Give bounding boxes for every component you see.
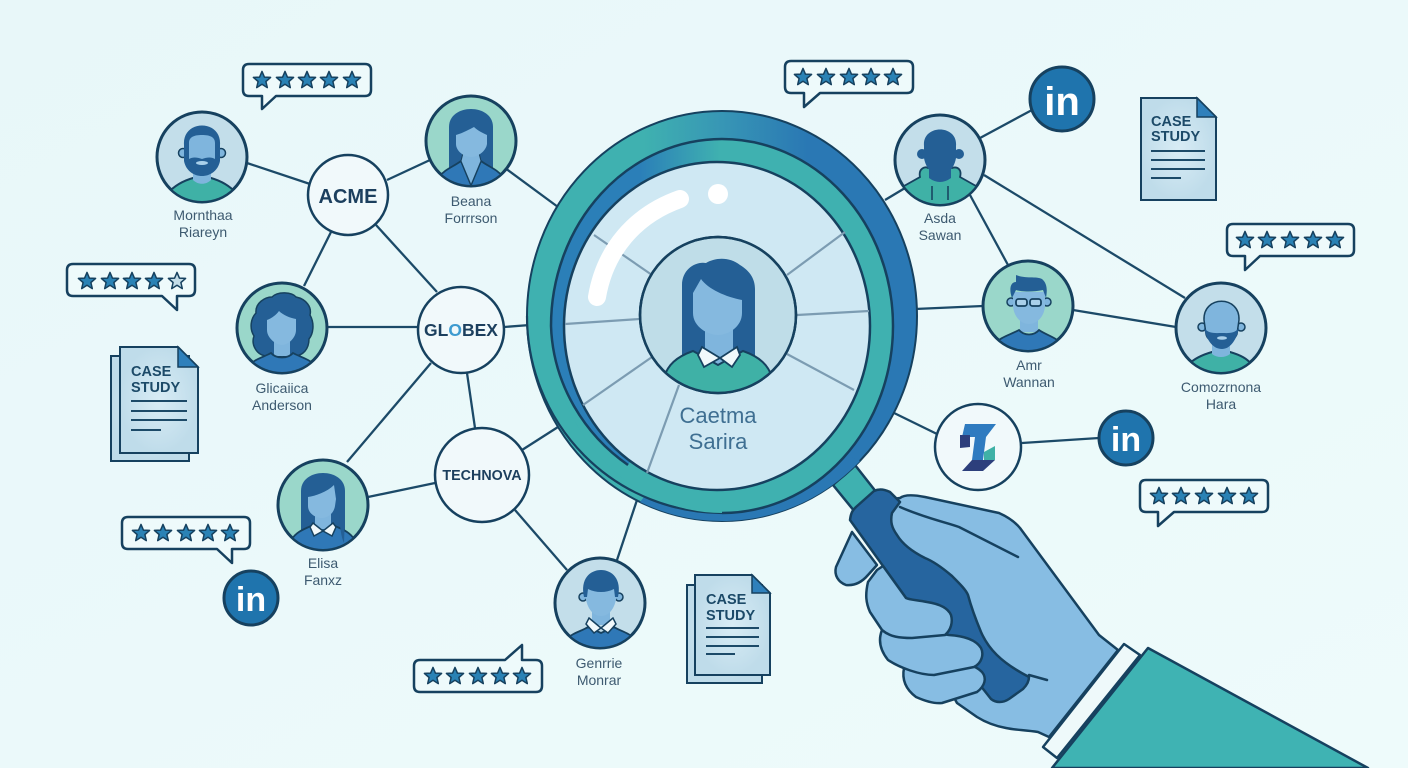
case study document top right: CASE (1151, 114, 1192, 130)
label: Asda: Asda (924, 210, 956, 226)
label: Comozrnona: Comozrnona (1181, 379, 1261, 395)
label: Genrrie (576, 655, 623, 688)
fingers (835, 532, 877, 585)
LinkedIn badge left (224, 571, 278, 625)
company node: ACME: ACME (319, 186, 377, 208)
company node: T logo (935, 404, 1021, 490)
avatar: Comozrnona (1176, 283, 1266, 378)
label: Beana: Forrrson (445, 210, 497, 226)
outer rim (527, 111, 917, 521)
LinkedIn badge top: in (1044, 80, 1080, 124)
avatar: Elisa (278, 460, 368, 555)
review bubble 7 (414, 645, 542, 692)
magnifying glass lens (527, 111, 917, 521)
case study document bottom (687, 575, 770, 683)
blue edge along the bottom (640, 400, 860, 521)
case study document left: STUDY (131, 380, 180, 396)
ring outline (551, 139, 893, 513)
blue crescent (551, 139, 722, 465)
label: Genrrie: Genrrie (576, 655, 623, 671)
review bubble 6 (122, 517, 250, 563)
label: Glicaiica: Glicaiica (256, 380, 309, 396)
case study document left: CASE (131, 364, 172, 380)
avatar: Mornthaa (157, 112, 247, 207)
label: Mornthaa (173, 207, 233, 240)
company node: TECHNOVA: TECHNOVA (442, 468, 522, 484)
case study document bottom: CASE (706, 592, 747, 608)
company node: ACME (308, 155, 388, 235)
label: Elisa (304, 555, 342, 588)
label: Elisa: Elisa (308, 555, 338, 571)
LinkedIn badge top (1030, 67, 1094, 131)
sleeve (1052, 648, 1368, 768)
inner teal ring (551, 139, 893, 513)
label: Mornthaa: Riareyn (179, 224, 227, 240)
company node: TECHNOVA (435, 428, 529, 522)
grip (850, 489, 1029, 702)
review bubble 1 (243, 64, 371, 109)
back of hand (880, 495, 1118, 737)
avatar: Beana (426, 96, 516, 191)
glass (564, 162, 870, 490)
case study document top right (1141, 98, 1216, 200)
review bubble 2 (785, 61, 913, 107)
hand holding the magnifying glass (835, 489, 1368, 768)
avatar: Genrrie (555, 558, 645, 653)
avatar: Amr (983, 261, 1073, 356)
label: Beana (445, 193, 497, 226)
label: Genrrie: Monrar (577, 672, 622, 688)
LinkedIn badge right: in (1111, 421, 1141, 459)
avatar: Glicaiica (237, 283, 327, 378)
cuff (1043, 644, 1140, 758)
central person name: Caetma (679, 403, 757, 428)
hand creases (900, 507, 1047, 680)
glass highlight (597, 199, 680, 297)
label: Comozrnona: Hara (1206, 396, 1236, 412)
review bubble 4 (1227, 224, 1354, 270)
label: Comozrnona (1181, 379, 1261, 412)
central person name (679, 403, 757, 454)
LinkedIn badge left: in (236, 581, 266, 619)
label: Mornthaa: Mornthaa (173, 207, 233, 223)
case study document left (111, 347, 198, 461)
label: Elisa: Fanxz (304, 572, 342, 588)
company node: GLOBEX: GLOBEX (424, 320, 498, 340)
avatar: Asda (895, 115, 985, 210)
label: Amr (1003, 357, 1055, 390)
case study document bottom: STUDY (706, 608, 755, 624)
teal band lower left (527, 316, 722, 513)
review bubble 3 (67, 264, 195, 310)
central person avatar (640, 237, 796, 405)
connection lines (247, 110, 1185, 570)
central person name: Sarira (689, 429, 748, 454)
LinkedIn badge right (1099, 411, 1153, 465)
label: Asda (919, 210, 961, 243)
label: Asda: Sawan (919, 227, 961, 243)
label: Amr: Amr (1016, 357, 1042, 373)
label: Amr: Wannan (1003, 374, 1055, 390)
case study document top right: STUDY (1151, 129, 1200, 145)
label: Glicaiica (252, 380, 312, 413)
company node: GLOBEX (418, 287, 504, 373)
spokes (565, 232, 869, 473)
review bubble 5 (1140, 480, 1268, 526)
label: Beana: Beana (451, 193, 491, 209)
magnifying glass handle connector (833, 465, 877, 512)
label: Glicaiica: Anderson (252, 397, 312, 413)
